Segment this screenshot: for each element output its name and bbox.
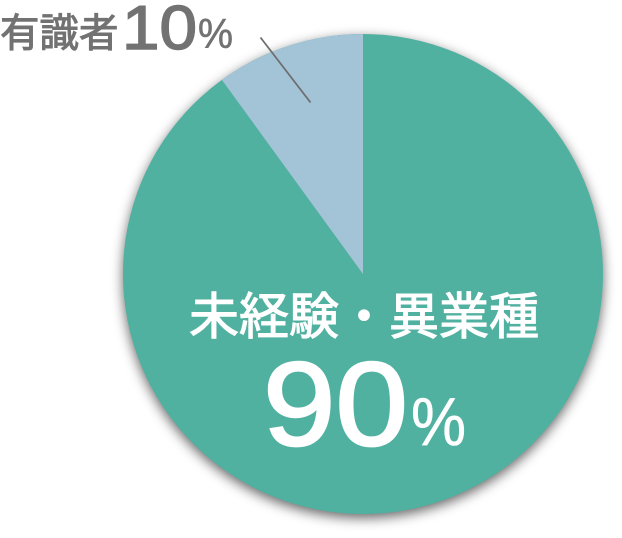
label number: 90: 90: [263, 338, 408, 471]
label text: 有識者: 有識者: [0, 12, 118, 56]
label: inexperienced 90%: [189, 289, 539, 471]
label percent sign: %: [198, 10, 233, 57]
leader line: [260, 38, 310, 102]
label: experienced 10%: [0, 0, 233, 63]
label text: 未経験・異業種: 未経験・異業種: [189, 289, 539, 345]
pie slice: experienced 10%: [222, 34, 363, 274]
label percent sign: %: [411, 384, 466, 460]
pie drop shadow: [123, 38, 603, 518]
pie slice: inexperienced 90%: [123, 34, 603, 514]
